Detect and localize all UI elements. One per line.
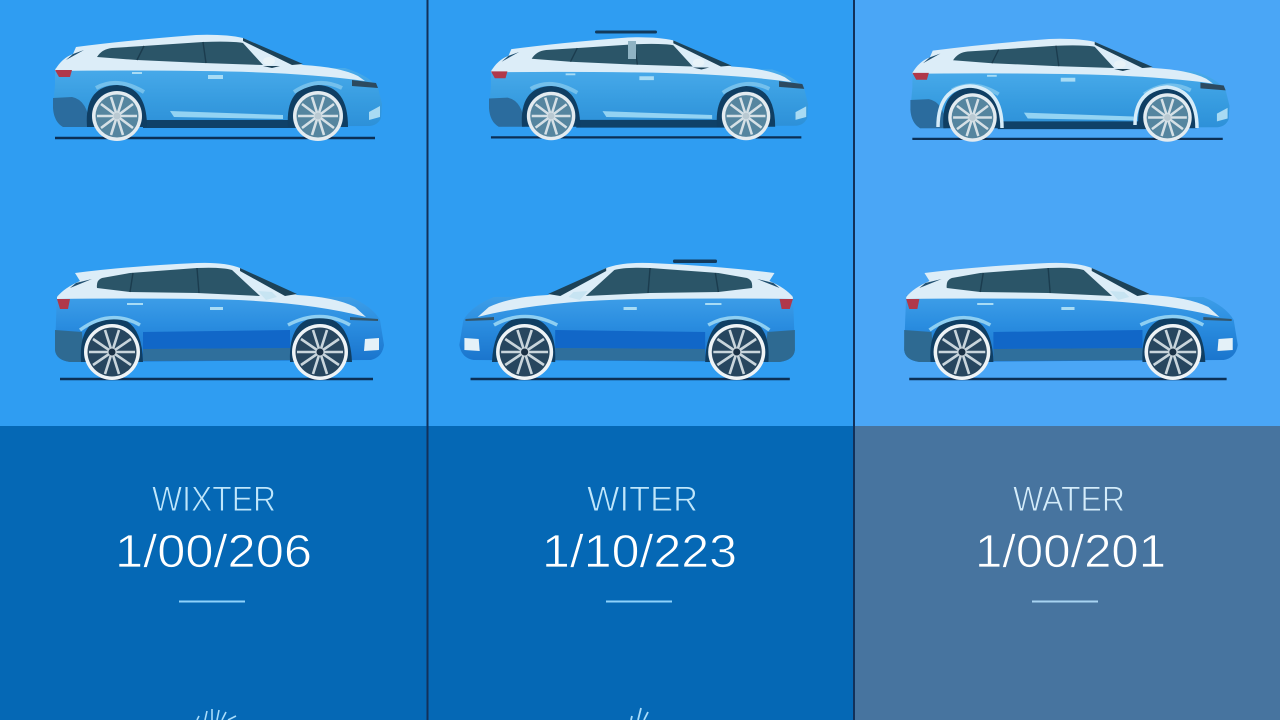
car: top right wagon xyxy=(910,39,1230,142)
car: top middle wagon xyxy=(489,30,808,140)
panel: column 2 xyxy=(427,0,854,720)
panel: column 1 xyxy=(0,0,427,720)
car: lower left SUV xyxy=(55,263,384,380)
label: date: 1/00/201 xyxy=(975,525,1166,577)
panel: column 3 xyxy=(854,0,1280,720)
label: date: 1/10/223 xyxy=(542,525,737,577)
label: date: 1/00/206 xyxy=(115,525,312,577)
label: season: WIXTER xyxy=(152,480,276,519)
icon: burst xyxy=(631,708,648,720)
car: lower middle SUV, mirrored xyxy=(459,260,795,380)
underline xyxy=(179,600,245,602)
label: season: WITER xyxy=(587,480,698,519)
car: top left wagon xyxy=(53,35,382,141)
underline xyxy=(1032,600,1098,602)
underline xyxy=(606,600,672,602)
label: season: WATER xyxy=(1013,480,1125,519)
car: lower right SUV xyxy=(904,263,1238,380)
icon: burst xyxy=(197,709,236,720)
